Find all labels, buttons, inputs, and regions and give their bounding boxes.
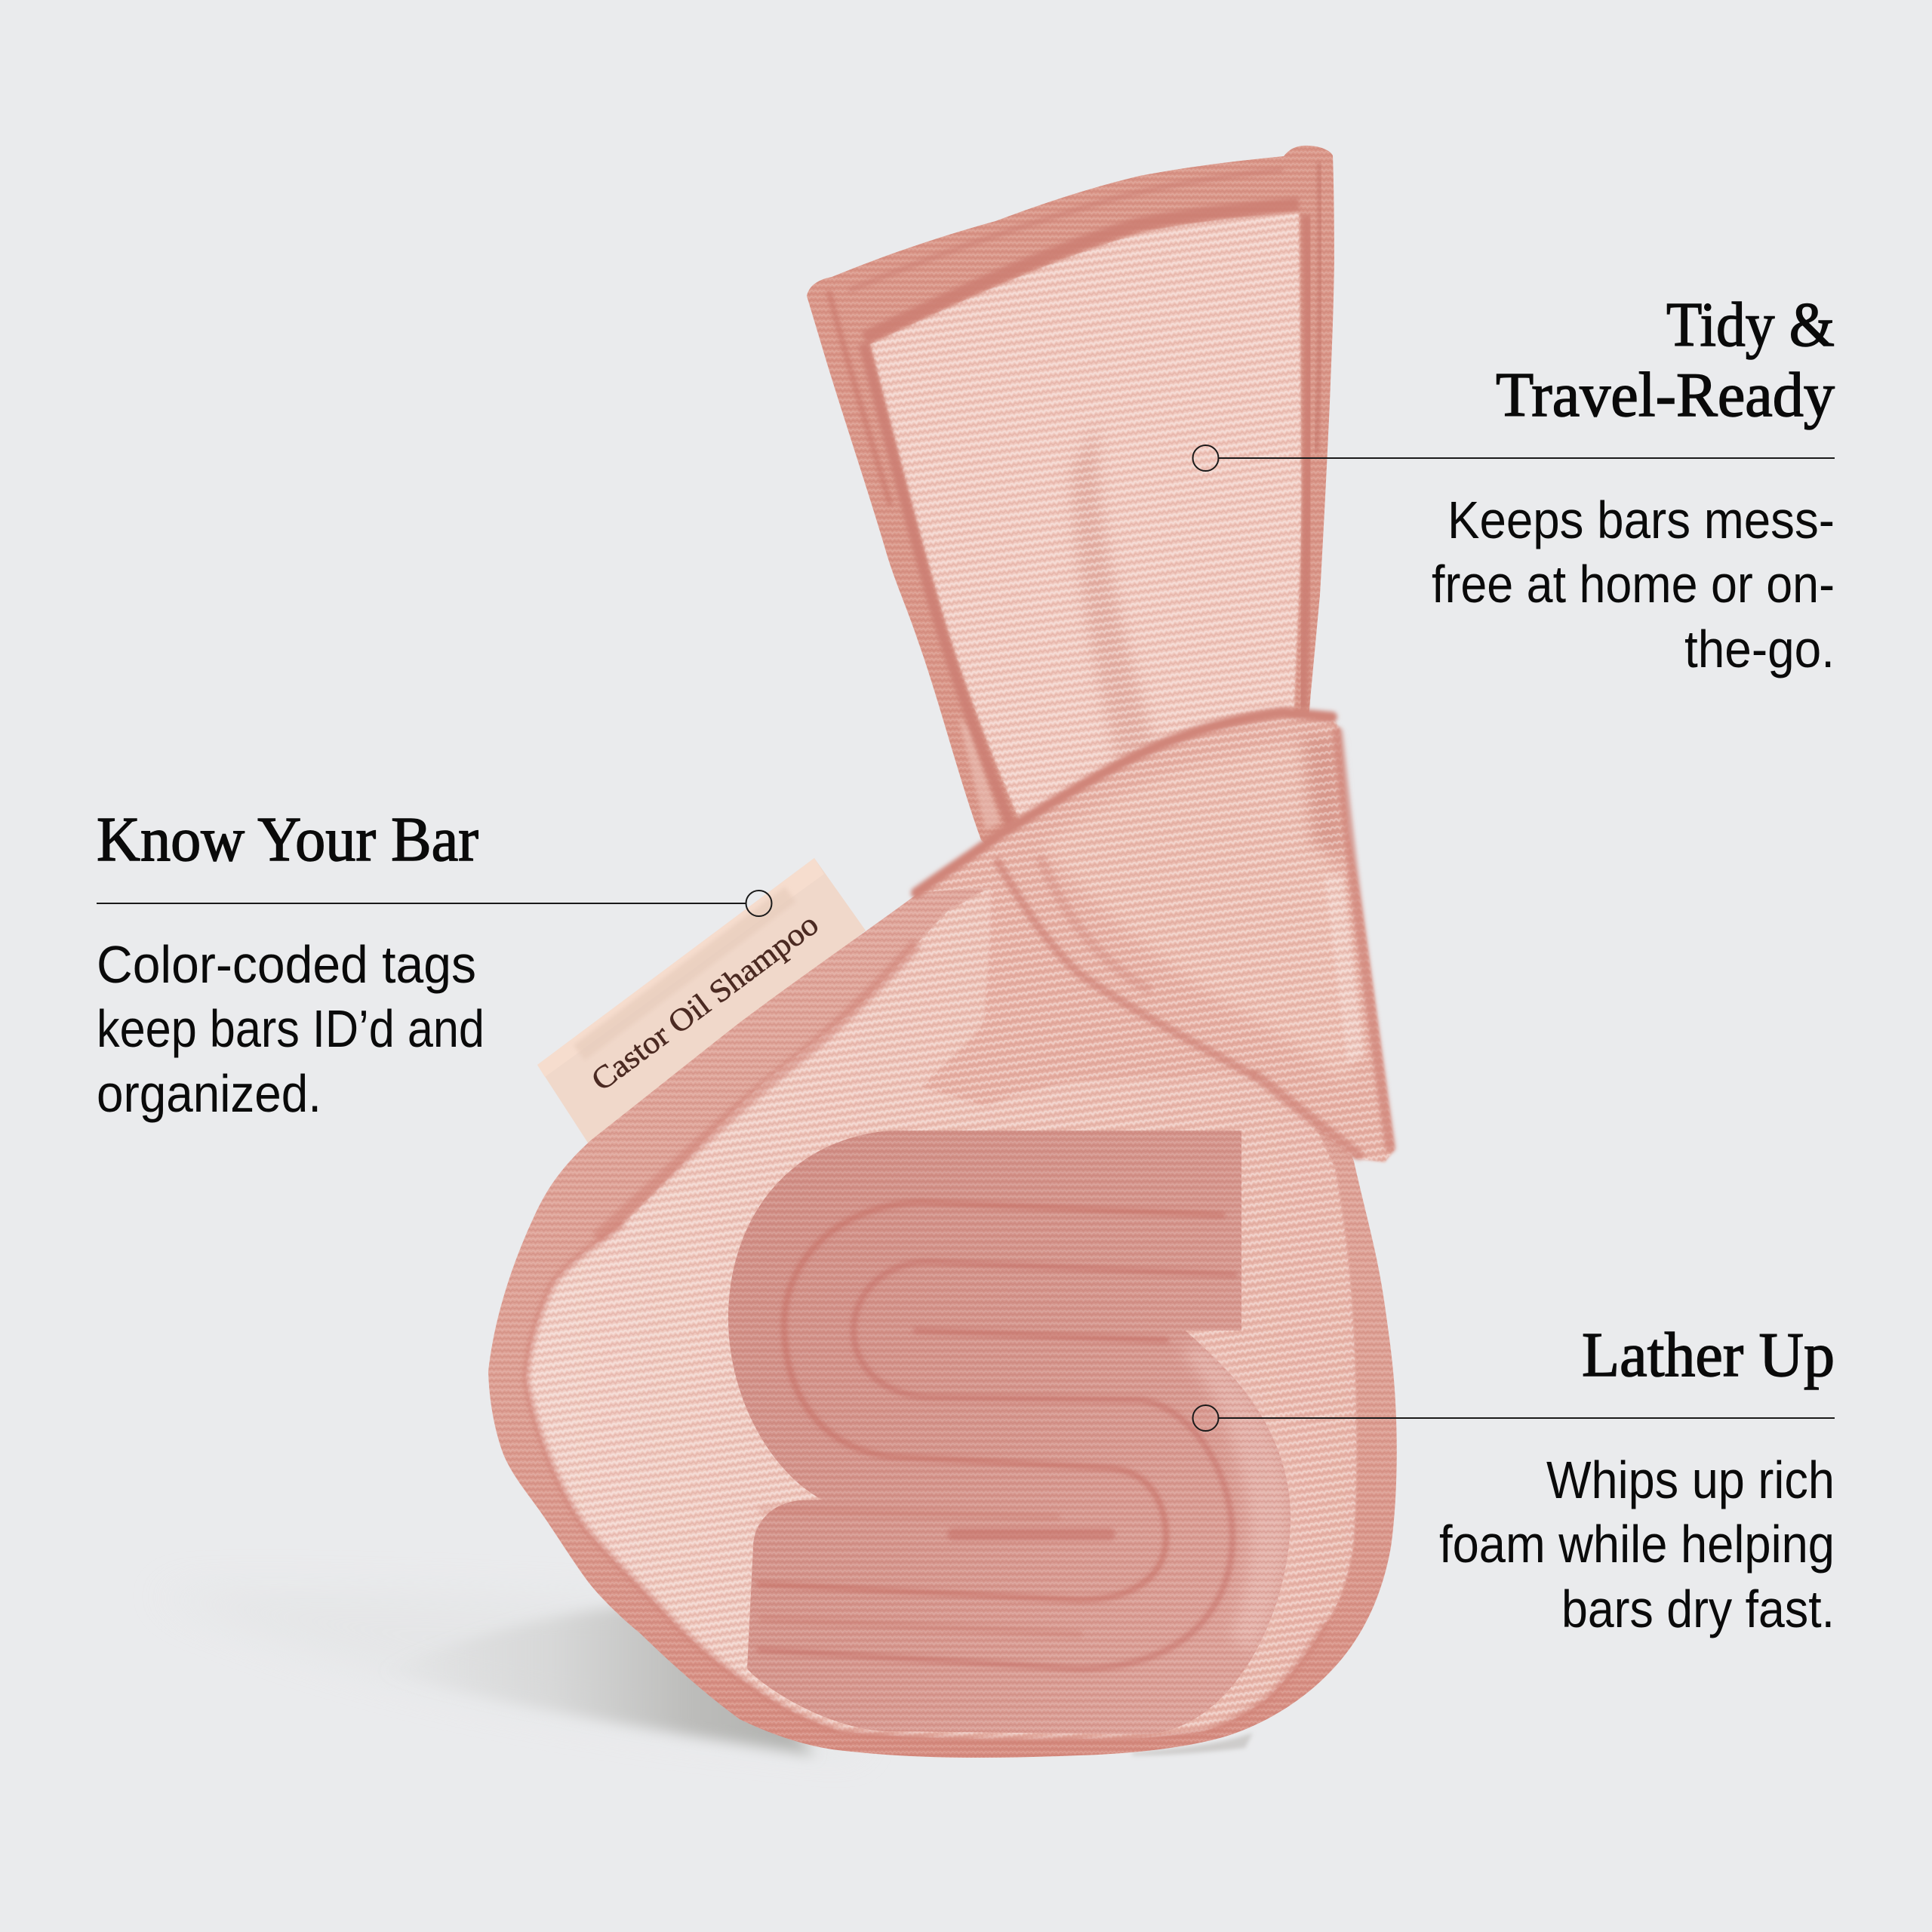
soap grooves [759,1202,1235,1669]
callout: Know Your Bar [97,804,771,1123]
product: mesh soap bag [488,146,1397,1758]
body text: Color-coded tags [97,935,476,994]
leader line with circle marker [1192,445,1835,471]
leader line with circle marker [1192,1405,1835,1431]
body text: Keeps bars mess- [1447,491,1835,549]
heading: Tidy and Travel-Ready [1496,290,1835,430]
floor shadow [151,1590,1253,1755]
tag label: Castor Oil Shampoo [585,907,825,1098]
body text [1439,1451,1835,1638]
panel: top mesh flap [807,146,1334,853]
heading: Tidy and Travel-Ready: Travel-Ready [1496,360,1835,430]
body text: keep bars ID’d and [97,999,485,1058]
body text: bars dry fast. [1561,1580,1835,1638]
heading: Lather Up: Lather Up [1582,1320,1835,1390]
heading: Tidy and Travel-Ready: Tidy & [1666,290,1835,360]
leader line with circle marker [97,891,771,916]
cuff hem and fold lines [916,712,1392,1155]
panel: cuff and gathered neck [916,712,1395,1162]
panel: bag body [488,845,1397,1758]
body text: organized. [97,1064,321,1123]
body text: foam while helping [1439,1515,1835,1574]
body text [1432,491,1835,678]
bag interior [526,887,1356,1740]
body text: the-go. [1684,620,1835,678]
callout: Tidy and Travel-Ready [1192,290,1835,678]
callout: Lather Up [1192,1320,1835,1638]
heading: Know Your Bar: Know Your Bar [97,804,478,875]
body text: Whips up rich [1546,1451,1835,1509]
body text [97,935,485,1123]
soap bar: S shape [728,1131,1291,1734]
tag: Castor Oil Shampoo [537,858,866,1146]
body text: free at home or on- [1432,555,1835,614]
